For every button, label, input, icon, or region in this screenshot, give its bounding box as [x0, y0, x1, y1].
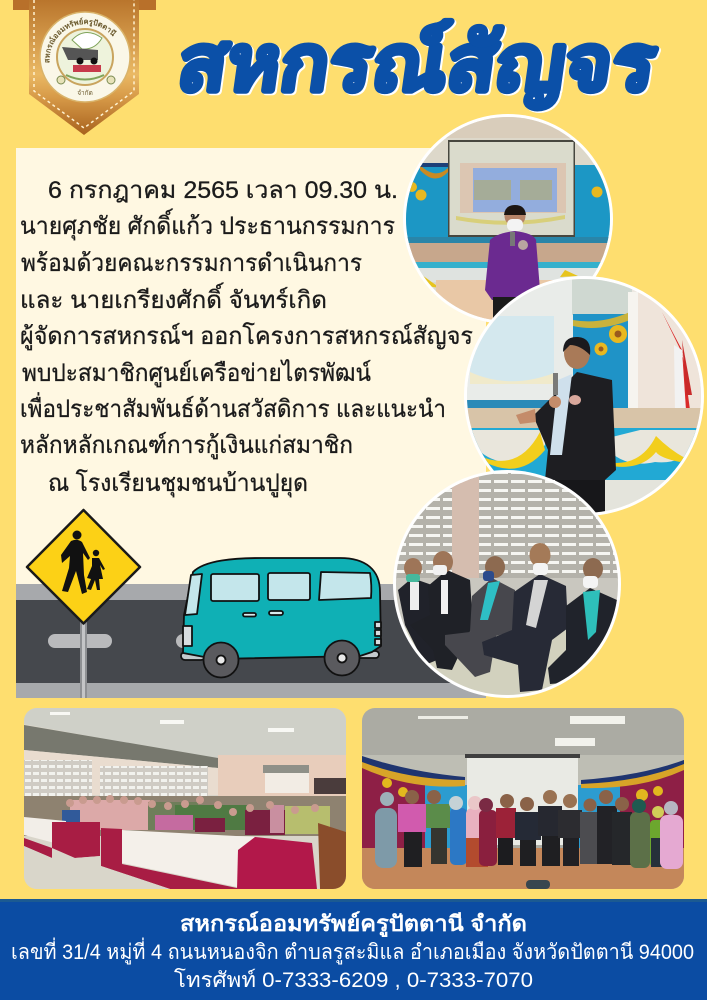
icon: cooperative seal: จำกัด [77, 89, 93, 97]
panel: cream story background [16, 148, 486, 698]
title: สหกรณ์สัญจร [174, 21, 664, 110]
icon: school crossing sign [27, 510, 140, 698]
ribbon badge with logo [13, 0, 156, 135]
story text block: 6 กรกฎาคม 2565 เวลา 09.30 น. [48, 177, 398, 204]
story text block: หลักหลักเกณฑ์การกู้เงินแก่สมาชิก [20, 431, 353, 460]
title: สหกรณ์สัญจร [172, 19, 662, 109]
story text block: เพื่อประชาสัมพันธ์ด้านสวัสดิการ และแนะนำ [20, 392, 446, 423]
story text block: พบปะสมาชิกศูนย์เครือข่ายไตรพัฒน์ [22, 359, 371, 388]
story text block: พร้อมด้วยคณะกรรมการดำเนินการ [21, 250, 362, 277]
footer band [0, 899, 707, 1000]
story text block [20, 177, 473, 498]
road illustration [16, 584, 486, 698]
seated men [398, 543, 617, 692]
photo: group on stage [362, 708, 684, 889]
icon: teal bus [181, 558, 381, 678]
icon: cooperative seal [39, 11, 130, 103]
footer organisation name: สหกรณ์ออมทรัพย์ครูปัตตานี จำกัด [180, 911, 527, 938]
story text block: และ นายเกรียงศักดิ์ จันทร์เกิด [20, 282, 327, 314]
group of people [375, 790, 683, 869]
photo circle: speaker in purple [400, 110, 620, 330]
story text block: ณ โรงเรียนชุมชนบ้านปูยุด [48, 469, 308, 498]
photo circle: seated committee members [390, 468, 625, 700]
story text block: ผู้จัดการสหกรณ์ฯ ออกโครงการสหกรณ์สัญจร [20, 322, 473, 351]
story text block: นายศุภชัย ศักดิ์แก้ว ประธานกรรมการ [20, 208, 395, 241]
photo circle: speaker with microphone [460, 275, 707, 525]
footer phone numbers: โทรศัพท์ 0-7333-6209 , 0-7333-7070 [174, 968, 533, 992]
icon: cooperative seal: สหกรณ์ออมทรัพย์ครูปัตตานี [44, 17, 117, 63]
photo: audience in hall [24, 708, 346, 889]
